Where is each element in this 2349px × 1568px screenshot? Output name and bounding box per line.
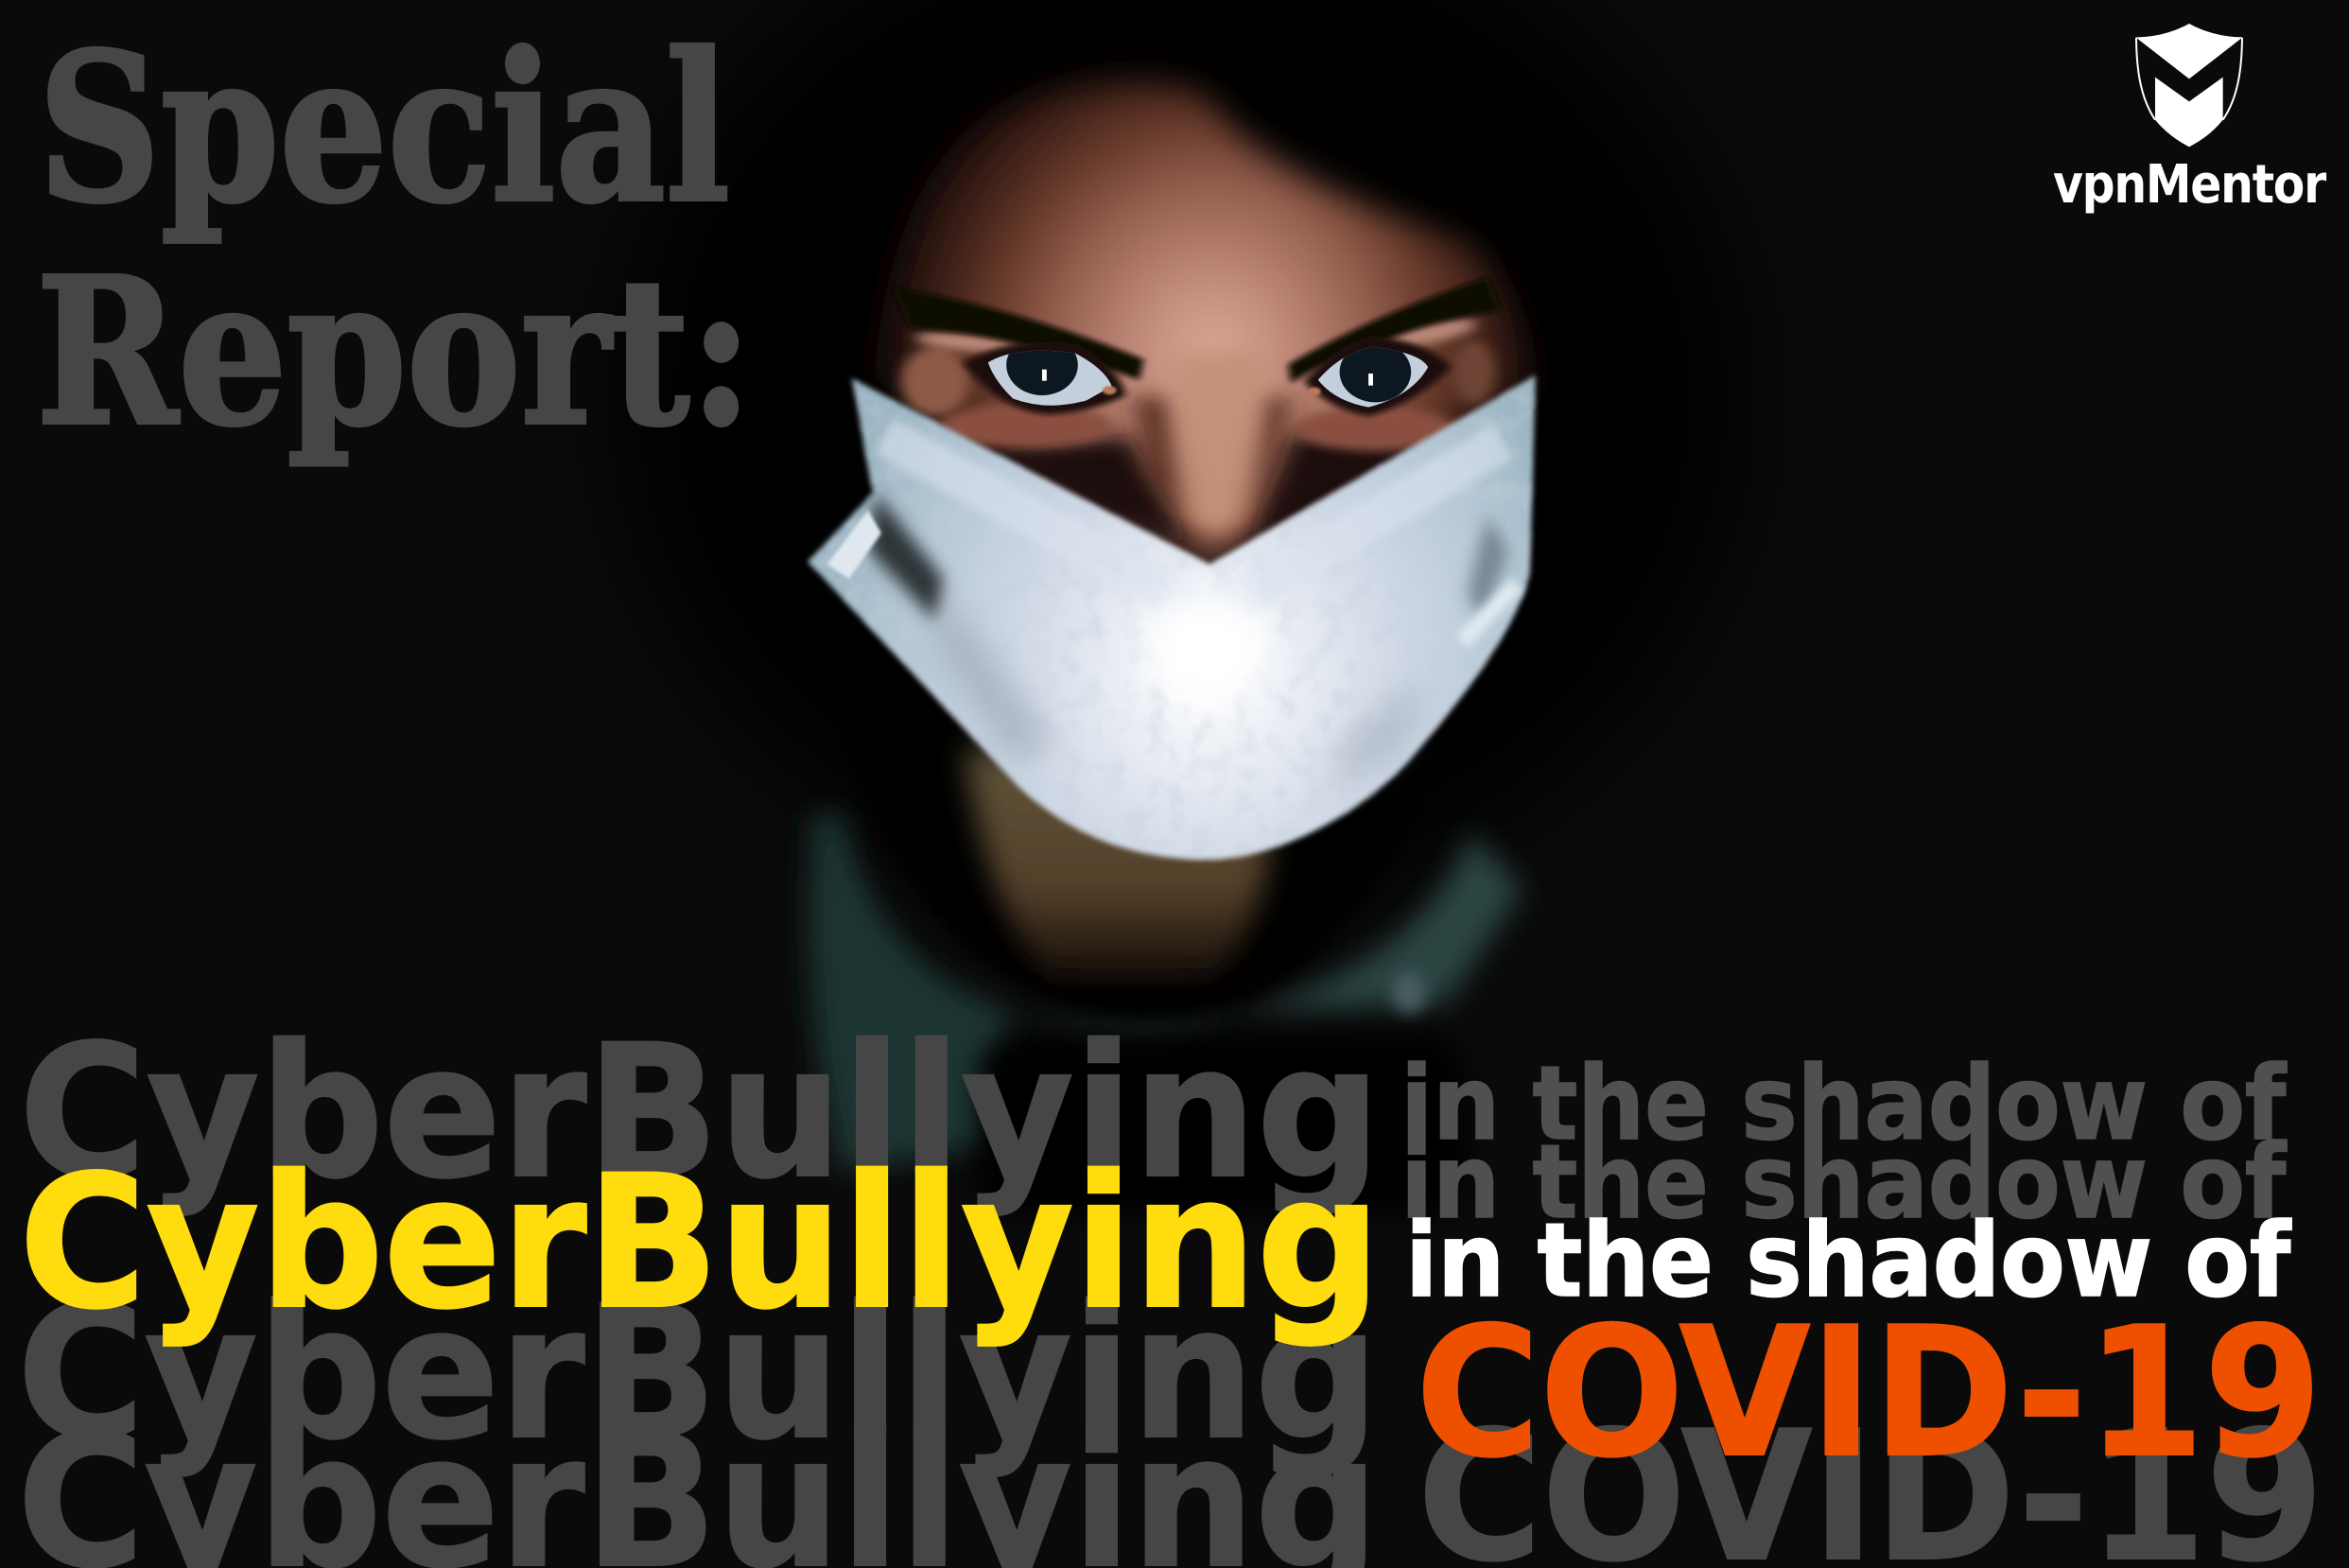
title: COVID-19: COVID-19: [1416, 1289, 2322, 1497]
logo: vpnMentor: [2053, 24, 2327, 216]
nose: [1172, 353, 1267, 534]
upper eyelids: [914, 328, 1017, 356]
neck: [832, 653, 1452, 1019]
shadow beside the nose: [969, 435, 1194, 549]
heading: Special Report: [36, 8, 753, 471]
eye: left: [963, 335, 1125, 414]
heading line: Report: Report:: [36, 234, 753, 471]
main title: [19, 1136, 2322, 1497]
title: CyberBullying: CyberBullying: [19, 1136, 1381, 1350]
shirt and shoulders: [615, 0, 1749, 1173]
photo: masked person lit by a phone: [615, 0, 1749, 1215]
heading line: Special: Special: [38, 8, 730, 248]
grey row: CyberBullying 3: CyberBullying: [17, 1266, 1379, 1480]
face: eyes and nose: [892, 277, 1502, 549]
phone silhouette: [979, 1036, 1466, 1215]
icon: shield: [2135, 24, 2243, 147]
repeated grey title rows: [17, 1005, 2323, 1568]
eyebrow: left: [892, 287, 1144, 380]
title: in the shadow of: in the shadow of: [1405, 1202, 2291, 1320]
eyebrow: right: [1288, 277, 1502, 383]
grey row: in the shadow of 2: in the shadow of: [1401, 1124, 2287, 1242]
surgical mask: [809, 375, 1536, 860]
grey row: in the shadow of 1: in the shadow of: [1401, 1045, 2287, 1163]
eye socket skin: [937, 404, 1112, 447]
grey row: CyberBullying 1: CyberBullying: [19, 1005, 1381, 1219]
face: forehead and skin: [873, 81, 1533, 565]
eye: right: [1304, 336, 1451, 416]
